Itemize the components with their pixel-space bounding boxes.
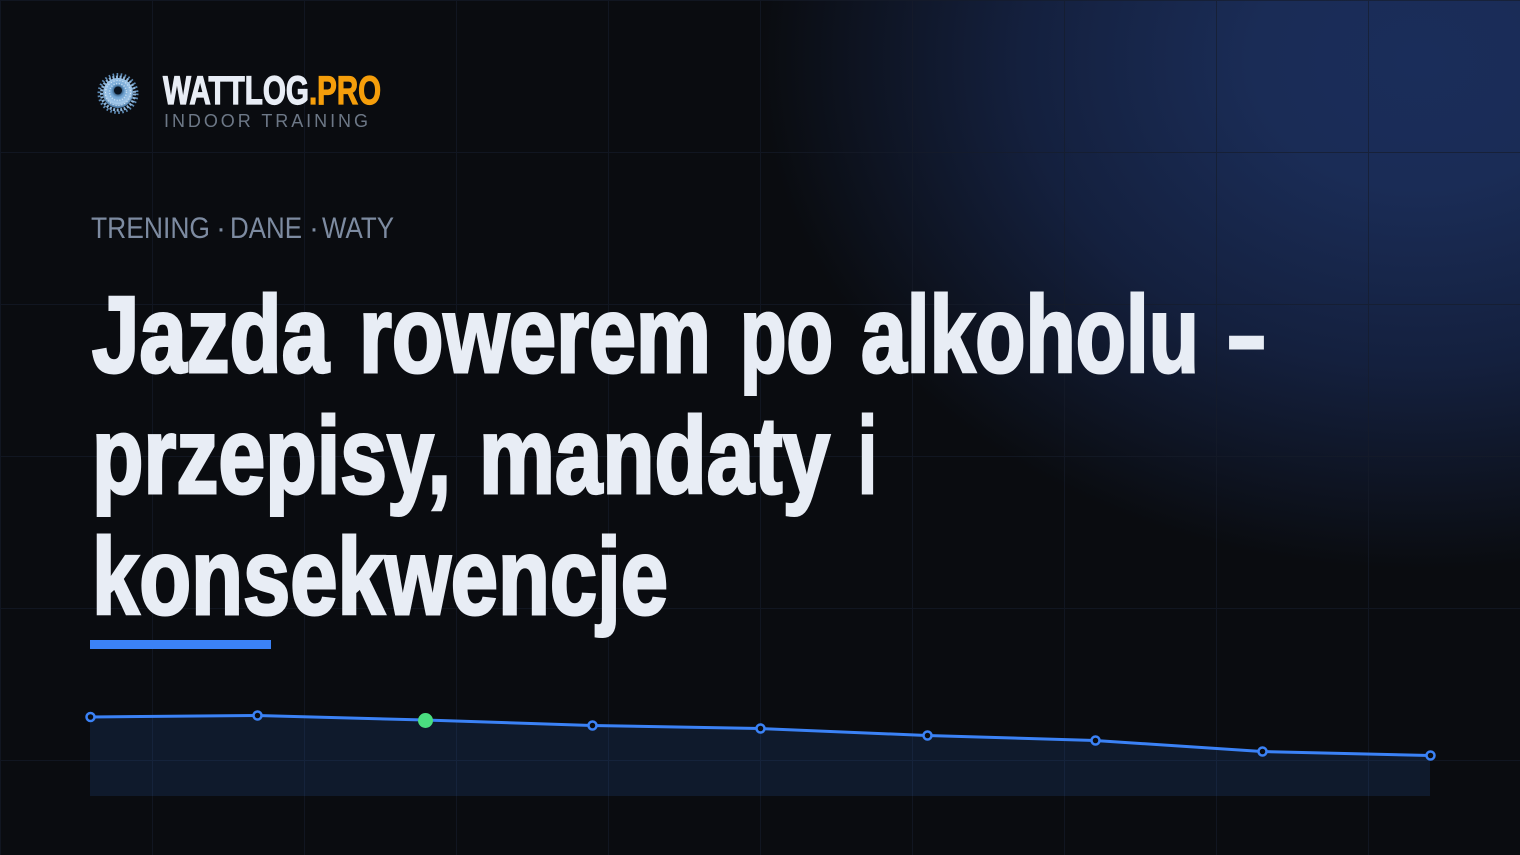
chart area fill bbox=[90, 716, 1430, 796]
title: i bbox=[858, 395, 877, 517]
logo tagline: INDOOR TRAINING bbox=[164, 111, 368, 131]
chart line bbox=[90, 716, 1430, 756]
line chart bbox=[86, 712, 1434, 796]
title: – bbox=[1228, 274, 1265, 396]
eyebrow: · bbox=[309, 212, 319, 245]
title: mandaty bbox=[479, 395, 830, 517]
logo bbox=[99, 69, 381, 131]
title: rowerem bbox=[359, 274, 711, 396]
title: alkoholu bbox=[861, 274, 1199, 396]
highlighted chart marker bbox=[418, 713, 433, 728]
title underline accent bbox=[90, 640, 271, 649]
eyebrow: TRENING bbox=[91, 212, 210, 245]
title: konsekwencje bbox=[92, 516, 668, 638]
eyebrow: · bbox=[216, 212, 226, 245]
logo wordmark: WATTLOG bbox=[163, 69, 309, 113]
eyebrow: DANE bbox=[230, 212, 302, 245]
title: po bbox=[740, 274, 833, 396]
title: Jazda bbox=[92, 274, 330, 396]
title: przepisy, bbox=[92, 395, 451, 517]
eyebrow: WATY bbox=[322, 212, 394, 245]
title bbox=[92, 274, 1265, 638]
eyebrow bbox=[91, 212, 394, 245]
icon: bicycle cassette bbox=[99, 74, 137, 112]
logo wordmark accent: .PRO bbox=[309, 69, 381, 113]
chart markers bbox=[86, 712, 1434, 760]
